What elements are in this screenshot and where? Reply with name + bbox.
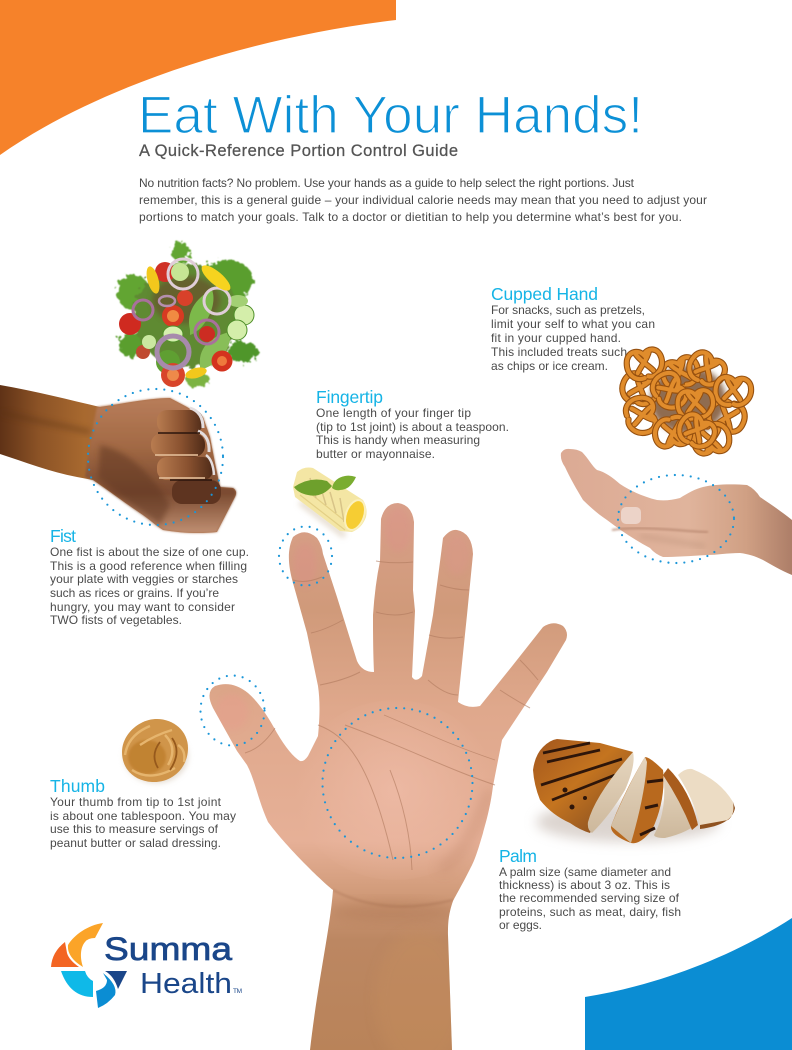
heading: fist: Fist	[50, 526, 76, 546]
text: cupped hand: limit your self to what you can	[491, 317, 655, 331]
text: fingertip: butter or mayonnaise.	[316, 447, 435, 461]
intro text	[139, 176, 707, 224]
dotted circle: palm	[322, 708, 472, 858]
dotted circle: thumb	[200, 676, 264, 746]
panel: fist	[0, 385, 249, 627]
text: thumb: use this to measure servings of	[50, 822, 219, 836]
text: cupped hand: fit in your cupped hand.	[491, 331, 621, 345]
text: cupped hand: This included treats such	[491, 345, 627, 359]
intro text: portions to match your goals. Talk to a doctor or dietitian to help you determine what’s best for you.	[139, 210, 682, 224]
panel: thumb	[50, 676, 264, 850]
text: thumb: Your thumb from tip to 1st joint	[50, 795, 222, 809]
text: thumb: peanut butter or salad dressing.	[50, 836, 221, 850]
image: main open hand	[200, 500, 570, 1050]
image: pretzels	[618, 348, 752, 455]
text: palm: proteins, such as meat, dairy, fish	[499, 905, 681, 919]
text: fist: This is a good reference when filling	[50, 559, 247, 573]
text: palm: or eggs.	[499, 918, 542, 932]
intro text: remember, this is a general guide – your individual calorie needs may mean that you need to adjust your	[139, 193, 707, 207]
text: fist: your plate with veggies or starches	[50, 572, 238, 586]
logo: Summa Health	[51, 923, 242, 1008]
image: arm and fist	[0, 385, 236, 533]
logo: Summa Health: Health	[140, 968, 232, 1000]
heading: thumb: Thumb	[50, 776, 105, 796]
blue corner shape	[585, 918, 792, 1050]
heading: cupped hand: Cupped Hand	[491, 284, 598, 304]
text: fingertip: One length of your finger tip	[316, 406, 471, 420]
palm and finger creases	[245, 561, 538, 870]
logo wordmark: Summa	[104, 931, 232, 967]
text: palm: A palm size (same diameter and	[499, 865, 671, 879]
text: palm: the recommended serving size of	[499, 891, 680, 905]
panel: cupped hand	[491, 284, 792, 575]
subtitle: A Quick-Reference Portion Control Guide	[139, 142, 458, 160]
text: fist: One fist is about the size of one cup.	[50, 545, 249, 559]
text: cupped hand: as chips or ice cream.	[491, 359, 608, 373]
heading: palm: Palm	[499, 846, 537, 866]
intro text: No nutrition facts? No problem. Use your hands as a guide to help select the right portions. Just	[139, 176, 635, 190]
text: thumb	[50, 795, 236, 850]
text: fingertip: (tip to 1st joint) is about a teaspoon.	[316, 420, 509, 434]
image: peanut butter	[122, 719, 188, 783]
fist fingers	[151, 408, 221, 504]
text: fist	[50, 545, 249, 627]
dotted circle: index fingertip	[279, 526, 332, 586]
image: cupped hand	[561, 449, 792, 575]
text: palm	[499, 865, 681, 932]
panel: palm	[499, 739, 735, 932]
image: butter curl	[293, 468, 369, 536]
heading: fingertip: Fingertip	[316, 387, 383, 407]
text: fist: hungry, you may want to consider	[50, 600, 235, 614]
text: fingertip: This is handy when measuring	[316, 433, 480, 447]
text: fist: such as rices or grains. If you’re	[50, 586, 219, 600]
image: salad	[117, 242, 258, 388]
title: Eat With Your Hands!	[138, 86, 643, 145]
text: fist: TWO fists of vegetables.	[50, 613, 182, 627]
text: fingertip	[316, 406, 509, 461]
orange corner shape	[0, 0, 396, 155]
text: thumb: is about one tablespoon. You may	[50, 809, 236, 823]
logo mark	[51, 923, 127, 1008]
panel: fingertip	[293, 387, 509, 536]
text: cupped hand: For snacks, such as pretzels,	[491, 303, 645, 317]
logo: Summa Health: TM	[233, 988, 242, 995]
text: cupped hand	[491, 303, 655, 373]
dotted circle: fist	[88, 389, 223, 525]
dotted circle: cupped hand	[618, 475, 734, 563]
image: grilled chicken	[533, 739, 735, 843]
text: palm: thickness) is about 3 oz. This is	[499, 878, 670, 892]
